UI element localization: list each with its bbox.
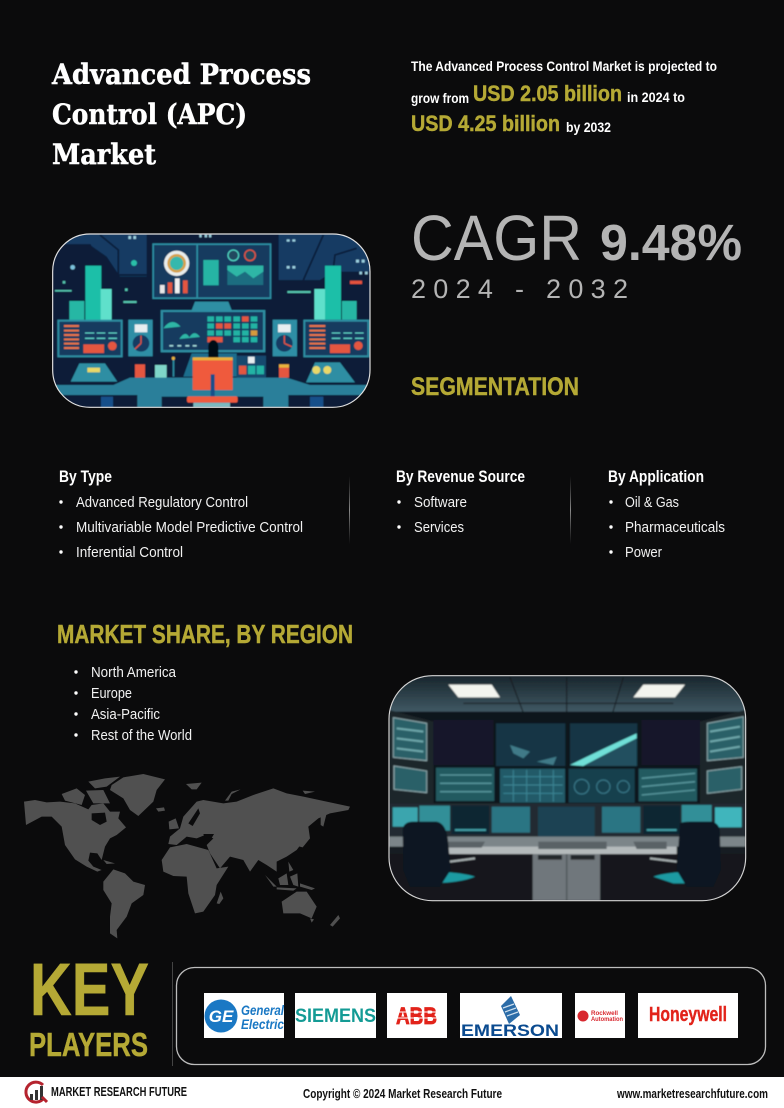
segment list: by type [59,467,303,561]
heading: segmentation: SEGMENTATION [411,373,579,401]
logo: General Electric: GE [209,1007,234,1026]
copyright: Copyright © 2024 Market Research Future [303,1087,502,1101]
title [51,58,311,171]
logo: Rockwell Automation [575,993,625,1038]
logo: General Electric: Electric [241,1016,284,1032]
title: Control (APC) [52,98,247,131]
heading: key players [29,948,149,1063]
heading: market share by region: MARKET SHARE, BY REGION [57,619,353,649]
region list: Asia-Pacific [91,706,160,723]
region list: North America [91,664,177,681]
region list: Europe [91,685,132,702]
heading: key players: KEY [30,948,149,1031]
title: Advanced Process [51,58,311,91]
photo: control room [389,676,746,901]
logo: ABB: ABB [396,1003,437,1030]
logo: Rockwell Automation: Automation [591,1017,623,1023]
segment list: by type: Advanced Regulatory Control [76,494,248,511]
logo: Siemens [295,993,376,1038]
segment list: by application: Oil & Gas [625,494,679,511]
market projection text: USD 4.25 billion [411,111,560,136]
logo: General Electric: General [241,1002,285,1018]
segment list: by revenue source: Software [414,494,467,511]
market projection text: in 2024 to [627,89,685,105]
segment list: by type: Inferential Control [76,544,183,561]
illustration: control room [53,234,370,407]
CAGR figure: 9.48% [600,214,742,271]
CAGR figure: CAGR [411,202,582,274]
region list [74,664,192,744]
segment list: by application [608,467,725,561]
world map [24,774,350,938]
logo: Honeywell: Honeywell [649,1004,727,1026]
segment list: by revenue source [396,467,525,536]
segment list: by application: Pharmaceuticals [625,519,725,536]
logo: Siemens: SIEMENS [295,1006,376,1027]
title: Market [52,138,156,171]
footer logo [26,1082,187,1102]
segment list: by application: Power [625,544,662,561]
market projection text: The Advanced Process Control Market is projected to [411,58,717,74]
footer logo: MARKET RESEARCH FUTURE [51,1085,187,1099]
market projection text: by 2032 [566,119,611,135]
logo: Emerson: EMERSON [461,1022,559,1040]
CAGR figure [411,202,742,274]
market projection text: grow from [411,90,469,106]
market projection text: USD 2.05 billion [473,81,622,106]
footer [0,1077,784,1108]
logo: ABB [387,993,447,1038]
heading: key players: PLAYERS [29,1026,148,1063]
segment list: by revenue source: Services [414,519,464,536]
key players panel [176,968,766,1064]
segment list: by revenue source: By Revenue Source [396,467,525,486]
CAGR period: 2024 - 2032 [411,274,628,304]
region list: Rest of the World [91,727,192,744]
logo: Honeywell [638,993,738,1038]
segment list: by application: By Application [608,467,704,486]
logo: Rockwell Automation: Rockwell [591,1011,618,1017]
logo: General Electric [204,993,285,1038]
segment list: by type: By Type [59,467,112,486]
segment list: by type: Multivariable Model Predictive Control [76,519,303,536]
logo: Emerson [460,993,562,1040]
market projection text [411,58,717,136]
